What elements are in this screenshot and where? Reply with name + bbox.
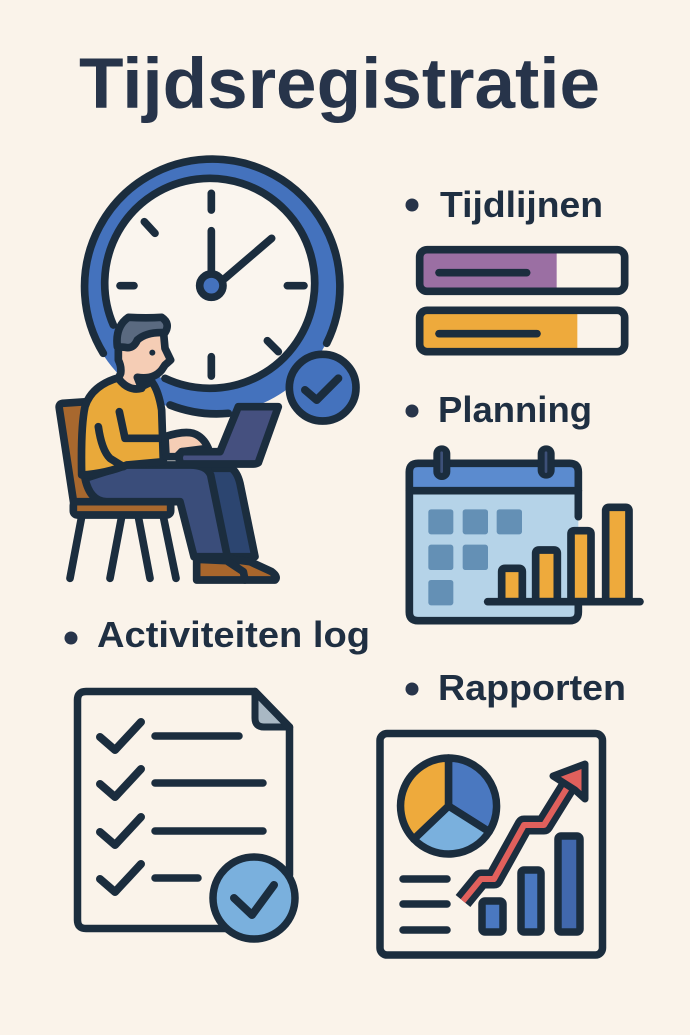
icon: timeline bar purple: [420, 250, 625, 291]
icon: hand: [165, 433, 208, 457]
icon: report dashboard: [380, 734, 602, 955]
icon: head: [117, 317, 171, 389]
icon: rear leg: [207, 468, 255, 557]
arrow: growth trend: [463, 764, 585, 901]
illustration: person working in front of clock: [59, 159, 356, 580]
icon: laptop: [179, 407, 278, 464]
right column: timelines and planning: [409, 250, 640, 621]
icon: shoes: [197, 559, 276, 580]
icon: document check badge: [213, 857, 295, 939]
label: Rapporten: Rapporten: [438, 667, 626, 708]
chart: pie: [401, 758, 497, 854]
label: Activiteiten log: Activiteiten log: [97, 614, 370, 655]
label: Tijdlijnen: Tijdlijnen: [440, 184, 603, 225]
icon: front leg: [85, 465, 227, 557]
title: Tijdsregistratie: [79, 45, 600, 124]
icon: calendar: [409, 445, 578, 621]
text lines: [403, 879, 447, 930]
icon: chair: [59, 402, 176, 578]
icon: timeline bar orange: [420, 310, 625, 352]
icon: planning bar chart: [488, 507, 640, 602]
chart: report bars: [482, 836, 580, 932]
icon: activity log document: [78, 692, 295, 939]
label: Planning: Planning: [438, 389, 592, 430]
icon: clock: [85, 159, 340, 414]
icon: torso: [81, 377, 163, 475]
icon: arm: [98, 412, 165, 467]
icon: clock check badge: [289, 354, 356, 421]
